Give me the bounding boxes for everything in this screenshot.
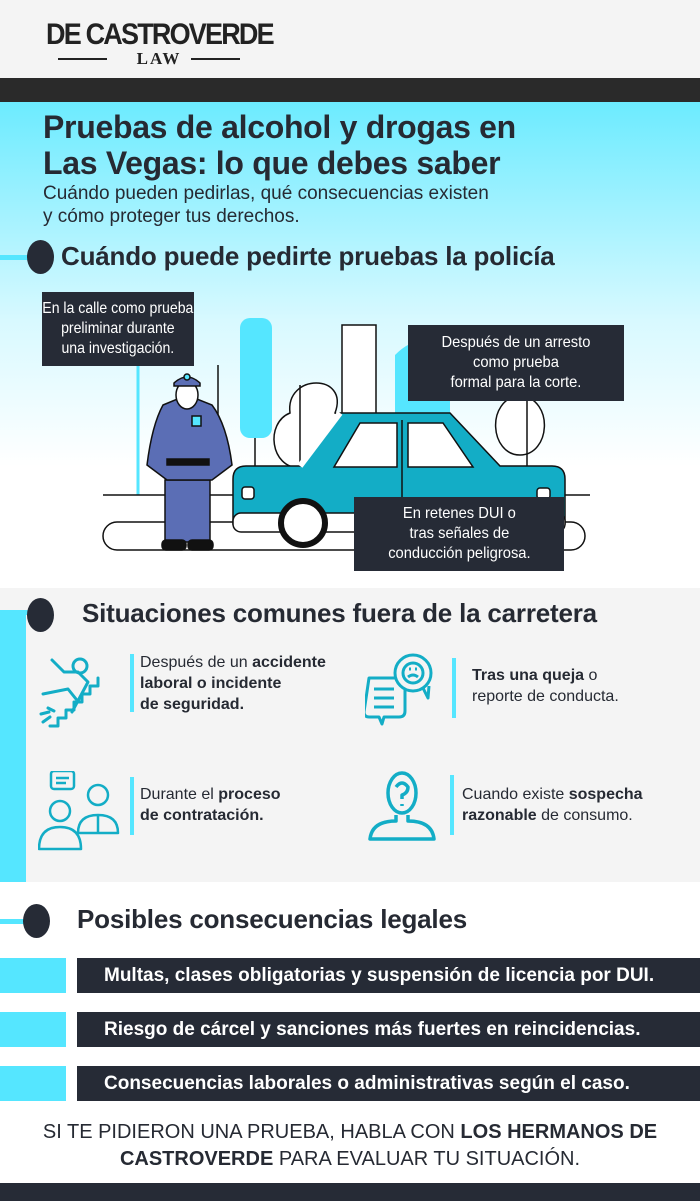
CTA: CASTROVERDE PARA EVALUAR TU SITUACIÓN. [120, 1148, 580, 1170]
icon: two people [38, 771, 120, 850]
callout: checkpoints: conducción peligrosa. [388, 545, 530, 562]
item: accident: laboral o incidente [140, 675, 281, 692]
subtitle: Cuándo pueden pedirlas, qué consecuencias existen [43, 183, 489, 204]
CTA [43, 1121, 657, 1170]
icon: falling on stairs [40, 658, 100, 728]
consequence 3 [0, 1066, 700, 1101]
callout: checkpoints [354, 497, 564, 571]
callout: arrest [408, 325, 624, 401]
consequence 1: Multas, clases obligatorias y suspensión de licencia por DUI. [104, 965, 654, 986]
car [233, 413, 565, 545]
consequence 3: Consecuencias laborales o administrativas según el caso. [104, 1073, 630, 1094]
callout: street [42, 292, 194, 366]
callout: checkpoints: tras señales de [409, 525, 509, 542]
callout: arrest: Después de un arresto [442, 334, 590, 351]
header [0, 0, 700, 78]
title [43, 109, 516, 181]
callout: arrest: como prueba [473, 354, 559, 371]
item: complaint: reporte de conducta. [472, 688, 619, 705]
title: Las Vegas: lo que debes saber [43, 145, 500, 181]
item: accident: Después de un accidente [140, 654, 326, 671]
callout: street: preliminar durante [61, 320, 175, 337]
consequence 1 [0, 958, 700, 993]
section heading: police: Cuándo puede pedirte pruebas la policía [61, 241, 555, 271]
subtitle: y cómo proteger tus derechos. [43, 206, 300, 227]
consequence 2: Riesgo de cárcel y sanciones más fuertes en reincidencias. [104, 1019, 640, 1040]
section heading: consequences: Posibles consecuencias legales [77, 904, 467, 934]
item: hiring [38, 771, 281, 850]
item: accident [40, 654, 326, 728]
officer [147, 374, 232, 550]
heading: Situaciones comunes fuera de la carretera [82, 598, 597, 628]
subtitle [43, 183, 489, 227]
item: complaint: Tras una queja o [472, 667, 597, 684]
panel: situations [0, 588, 700, 882]
item: complaint [365, 654, 619, 726]
callout: street: En la calle como prueba [42, 300, 194, 317]
item: hiring: Durante el proceso [140, 786, 281, 803]
item: suspicion: razonable de consumo. [462, 807, 633, 824]
item: suspicion: Cuando existe sospecha [462, 786, 643, 803]
footer bar [0, 1183, 700, 1201]
callout: street: una investigación. [62, 340, 174, 357]
hero gradient section [0, 102, 700, 588]
CTA: SI TE PIDIERON UNA PRUEBA, HABLA CON LOS HERMANOS DE [43, 1121, 657, 1143]
logo [46, 18, 274, 68]
item: suspicion [368, 771, 643, 841]
consequence 2 [0, 1012, 700, 1047]
title: Pruebas de alcohol y drogas en [43, 109, 516, 145]
callout: arrest: formal para la corte. [451, 374, 581, 391]
item: hiring: de contratación. [140, 807, 264, 824]
logo: DE CASTROVERDE [46, 18, 273, 51]
logo: LAW [137, 49, 181, 68]
illustration [102, 318, 590, 551]
item: accident: de seguridad. [140, 696, 244, 713]
icon: chat bubbles [365, 654, 432, 726]
icon: person with question [368, 771, 436, 841]
callout: checkpoints: En retenes DUI o [403, 505, 515, 522]
